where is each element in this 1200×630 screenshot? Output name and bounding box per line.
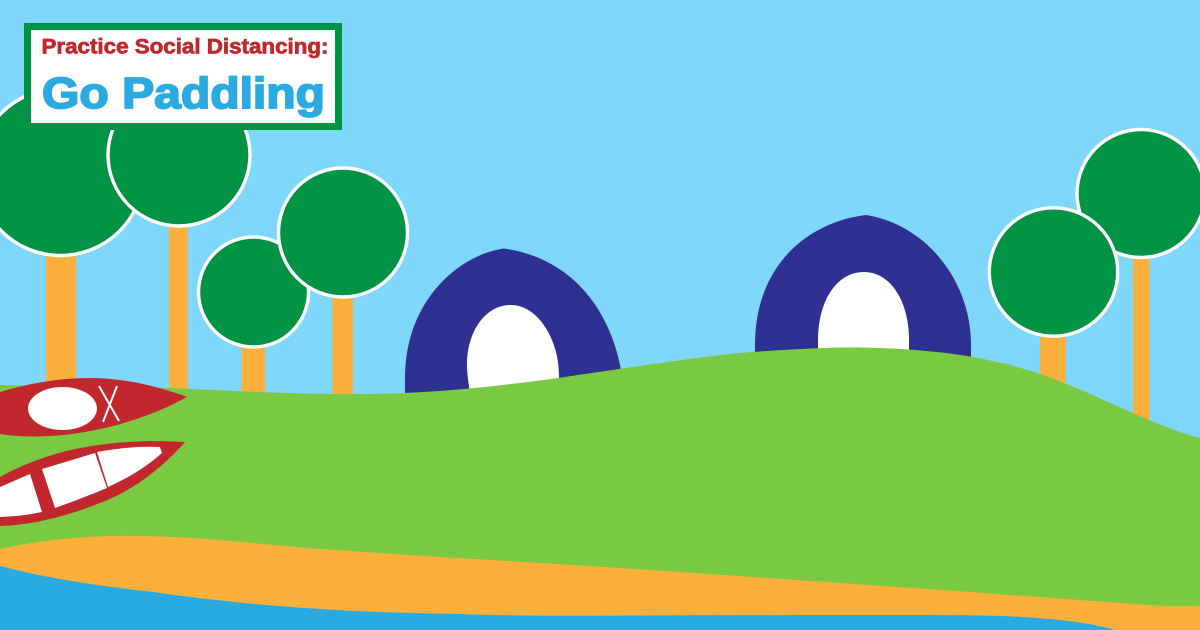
tree: near right xyxy=(989,208,1118,400)
title box xyxy=(28,26,338,126)
tent: left xyxy=(405,248,621,400)
kayak xyxy=(0,378,187,436)
canoe xyxy=(0,441,185,526)
tree: second left xyxy=(108,84,250,400)
sand bank xyxy=(0,536,1200,630)
tree: fourth left xyxy=(278,168,408,400)
title: line 2: Go Paddling xyxy=(42,69,325,118)
tree: small left xyxy=(198,237,308,400)
title: line 1: Practice Social Distancing: xyxy=(42,36,328,58)
green hill xyxy=(0,347,1200,630)
tent: right xyxy=(755,215,971,400)
tree: far left xyxy=(0,88,144,400)
tree: far right xyxy=(1077,130,1200,430)
water xyxy=(0,566,1116,630)
